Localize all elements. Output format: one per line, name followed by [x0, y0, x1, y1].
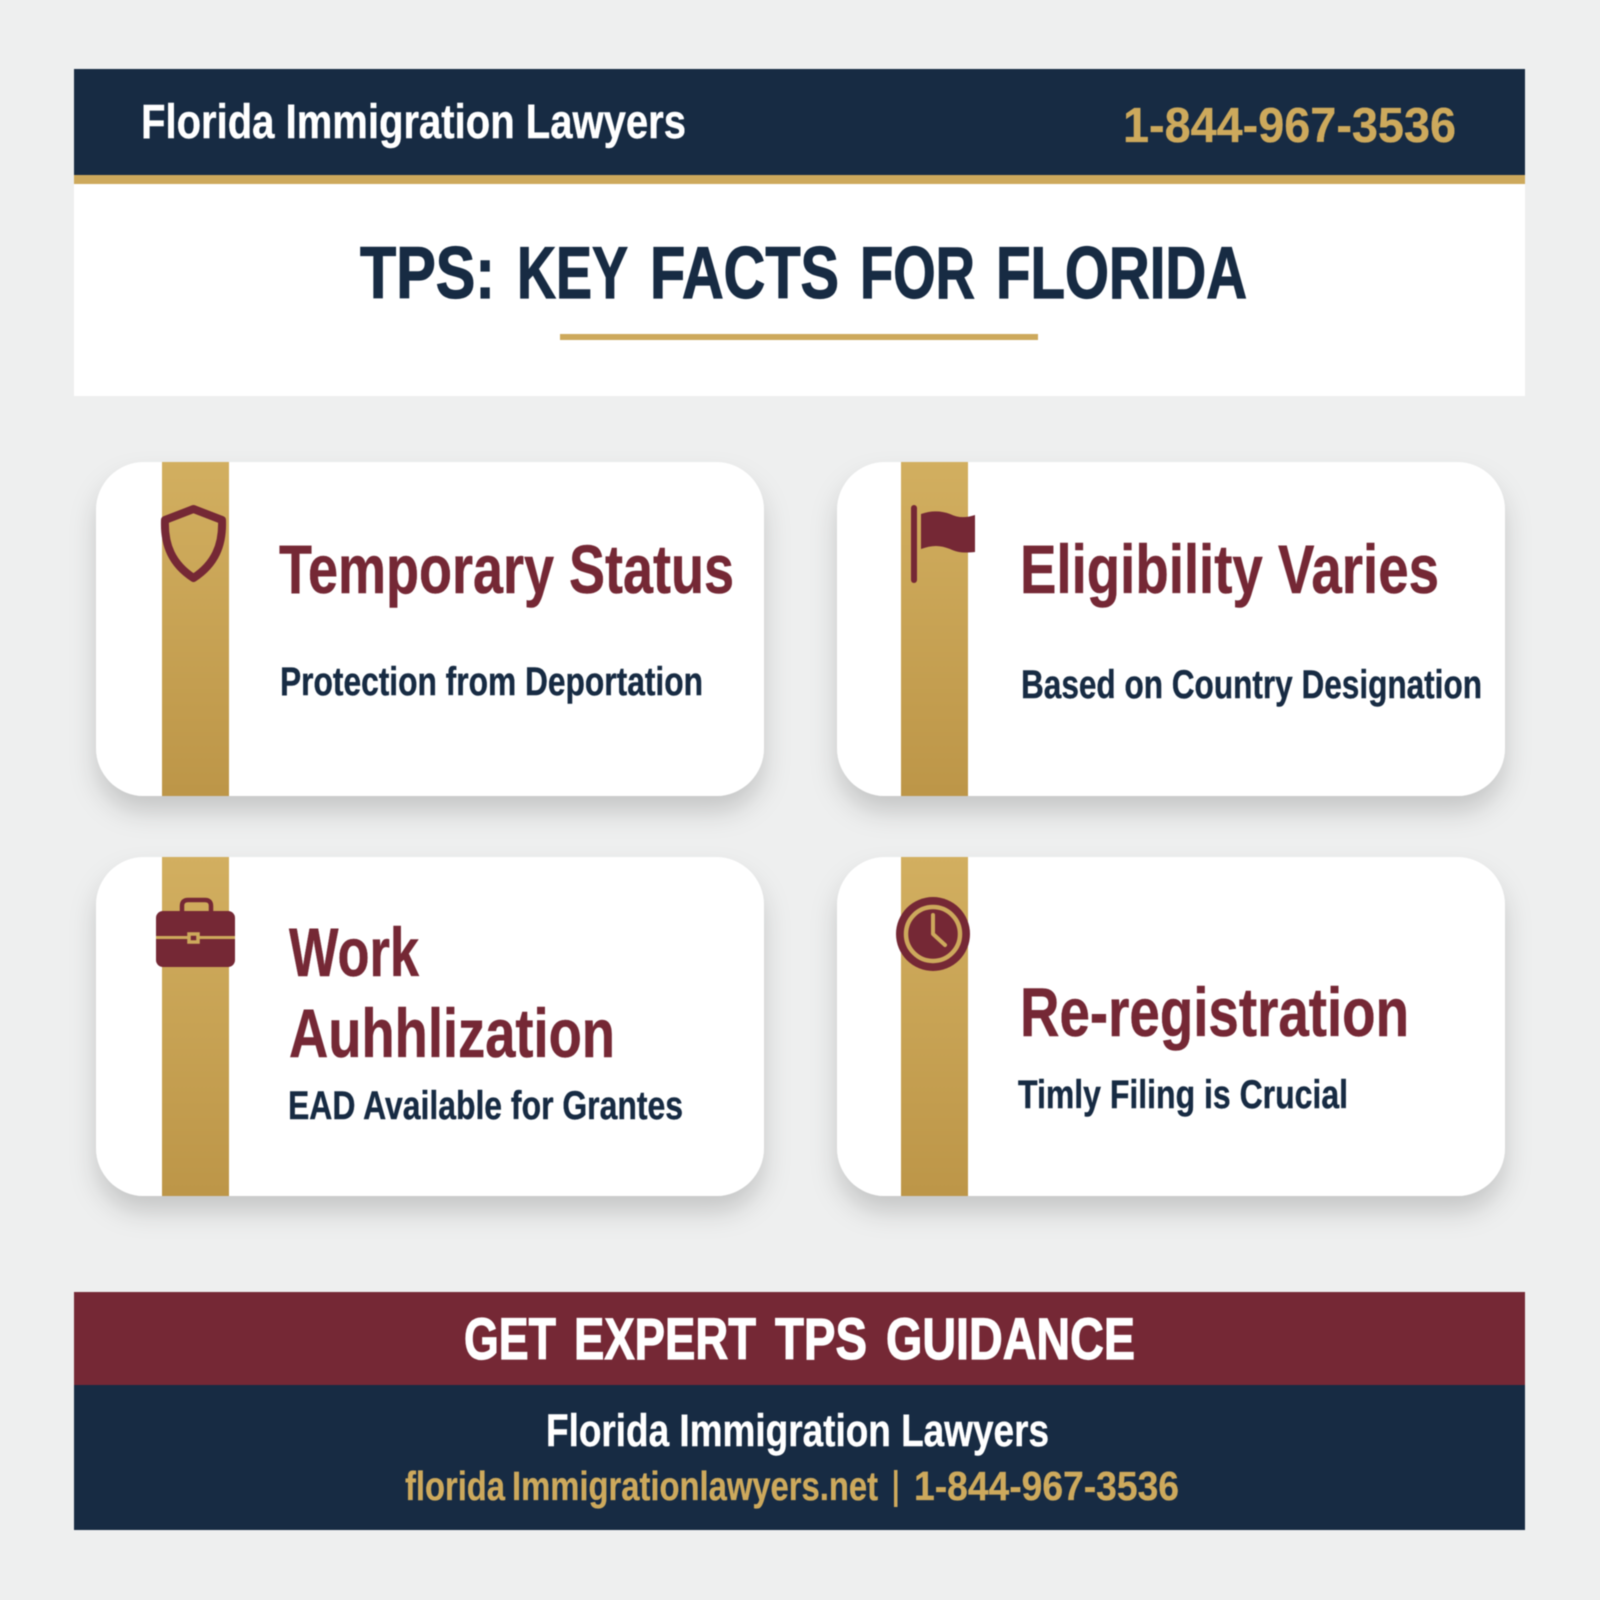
- card: temporary status: [96, 462, 764, 796]
- footer website and phone: Immigrationlawyers.net: [512, 1463, 878, 1509]
- main title: FOR: [860, 233, 975, 314]
- icon: briefcase: [156, 900, 235, 967]
- main title: FLORIDA: [996, 233, 1247, 314]
- main title: [360, 233, 1247, 314]
- footer website and phone: [405, 1463, 1179, 1509]
- footer panel: [74, 1385, 1525, 1530]
- card: work authorization: [96, 857, 764, 1196]
- heading: Eligibility Varies: [1020, 531, 1439, 608]
- description: EAD Available for Grantes: [288, 1084, 683, 1128]
- description: Based on Country Designation: [1021, 663, 1482, 707]
- icon: clock: [896, 897, 970, 971]
- heading: Temporary Status: [279, 531, 734, 608]
- icon: shield: [165, 509, 222, 578]
- heading: Work: [289, 914, 419, 991]
- heading: [289, 914, 615, 1072]
- card: eligibility varies: [837, 462, 1505, 796]
- main title: TPS:: [360, 233, 495, 314]
- heading: Re-registration: [1020, 974, 1409, 1051]
- card: re-registration: [837, 857, 1505, 1196]
- banner text: EXPERT: [574, 1307, 756, 1372]
- description: Protection from Deportation: [280, 660, 703, 704]
- banner text: [464, 1307, 1135, 1372]
- main title: FACTS: [650, 233, 839, 314]
- banner text: GET: [464, 1307, 556, 1372]
- banner text: GUIDANCE: [886, 1307, 1135, 1372]
- heading: Auhhlization: [289, 995, 615, 1072]
- icon: flag: [911, 505, 975, 583]
- main title: KEY: [517, 233, 628, 314]
- footer website and phone: florida: [405, 1463, 506, 1509]
- firm name: Florida Immigration Lawyers: [141, 96, 686, 149]
- footer website and phone: 1-844-967-3536: [914, 1463, 1179, 1509]
- banner text: TPS: [775, 1307, 867, 1372]
- title underline: [560, 334, 1038, 340]
- description: Timly Filing is Crucial: [1018, 1073, 1348, 1117]
- title panel: [74, 184, 1525, 396]
- header bar: [74, 69, 1525, 184]
- footer firm name: Florida Immigration Lawyers: [546, 1405, 1049, 1456]
- phone number: 1-844-967-3536: [1123, 99, 1456, 153]
- call to action banner: [74, 1292, 1525, 1385]
